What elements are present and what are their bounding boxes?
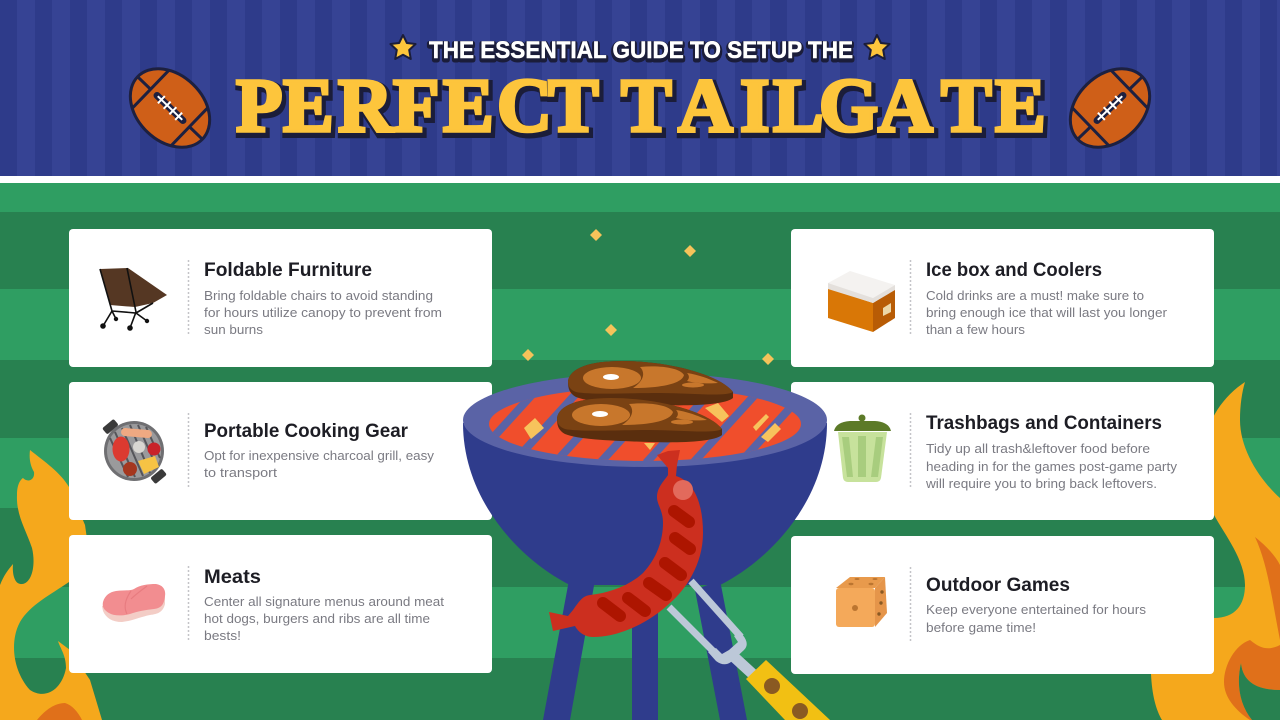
text block: than a few hours <box>926 322 1026 337</box>
heading: Foldable Furniture <box>204 260 372 281</box>
panel: Trashbags and Containers card <box>791 382 1214 520</box>
text block: sun burns <box>204 322 264 337</box>
icon: left football <box>106 44 234 172</box>
icon: trash can <box>834 414 891 482</box>
panel: Portable Cooking Gear card <box>69 382 492 520</box>
icon: right flame <box>1151 382 1280 720</box>
text block: for hours utilize canopy to prevent from <box>204 305 442 320</box>
subtitle: THE ESSENTIAL GUIDE TO SETUP THE <box>429 37 853 64</box>
icon: cooler <box>828 271 895 332</box>
steak: bottom <box>557 398 722 442</box>
grill grate and coals <box>489 392 801 461</box>
text block: Cold drinks are a must! make sure to <box>926 288 1144 303</box>
text block: heading in for the games post-game party <box>926 459 1178 474</box>
text block <box>926 602 1147 635</box>
subtitle: THE ESSENTIAL GUIDE TO SETUP THE <box>429 39 853 66</box>
text block: to transport <box>204 465 277 480</box>
grill bowl <box>463 423 827 585</box>
title: PERFECT TAILGATE <box>238 67 1048 151</box>
text block <box>926 288 1168 337</box>
fork <box>669 581 830 720</box>
text block: hot dogs, burgers and ribs are all time <box>204 611 430 626</box>
text block: before game time! <box>926 620 1036 635</box>
icon: mini grill <box>102 419 167 484</box>
icon: left star <box>390 35 416 59</box>
icon: right star <box>864 35 890 59</box>
panel: Outdoor Games card <box>791 536 1214 674</box>
text block: Center all signature menus around meat <box>204 594 444 609</box>
text block: Opt for inexpensive charcoal grill, easy <box>204 448 435 463</box>
panel: header banner <box>0 0 1280 183</box>
text block: bests! <box>204 628 241 643</box>
text block <box>204 288 442 337</box>
panel: field background <box>0 183 1280 720</box>
sausage <box>549 450 703 637</box>
heading: Portable Cooking Gear <box>204 421 409 442</box>
icon: raw meat <box>102 584 165 622</box>
grill illustration <box>463 361 830 720</box>
panel: Meats card <box>69 535 492 673</box>
text block: will require you to bring back leftovers. <box>925 476 1157 491</box>
icon: dice <box>836 577 887 627</box>
text block <box>204 448 435 480</box>
text block: Keep everyone entertained for hours <box>926 602 1147 617</box>
steak: top <box>568 361 733 405</box>
text block: Tidy up all trash&leftover food before <box>926 441 1150 456</box>
icon: folding chair <box>100 268 167 331</box>
icon: right football <box>1046 44 1174 172</box>
icon: left flame <box>0 450 102 720</box>
panel: Foldable Furniture card <box>69 229 492 367</box>
grill rim <box>463 373 827 467</box>
heading: Ice box and Coolers <box>926 260 1102 281</box>
grill legs <box>543 580 747 720</box>
heading: Meats <box>204 567 261 588</box>
heading: Trashbags and Containers <box>926 413 1162 434</box>
sparks <box>522 229 774 365</box>
text block <box>925 441 1178 491</box>
panel: Ice box and Coolers card <box>791 229 1214 367</box>
title: PERFECT TAILGATE <box>236 64 1046 148</box>
heading: Outdoor Games <box>926 575 1070 596</box>
text block: bring enough ice that will last you longer <box>926 305 1168 320</box>
text block <box>204 594 444 643</box>
text block: Bring foldable chairs to avoid standing <box>204 288 433 303</box>
